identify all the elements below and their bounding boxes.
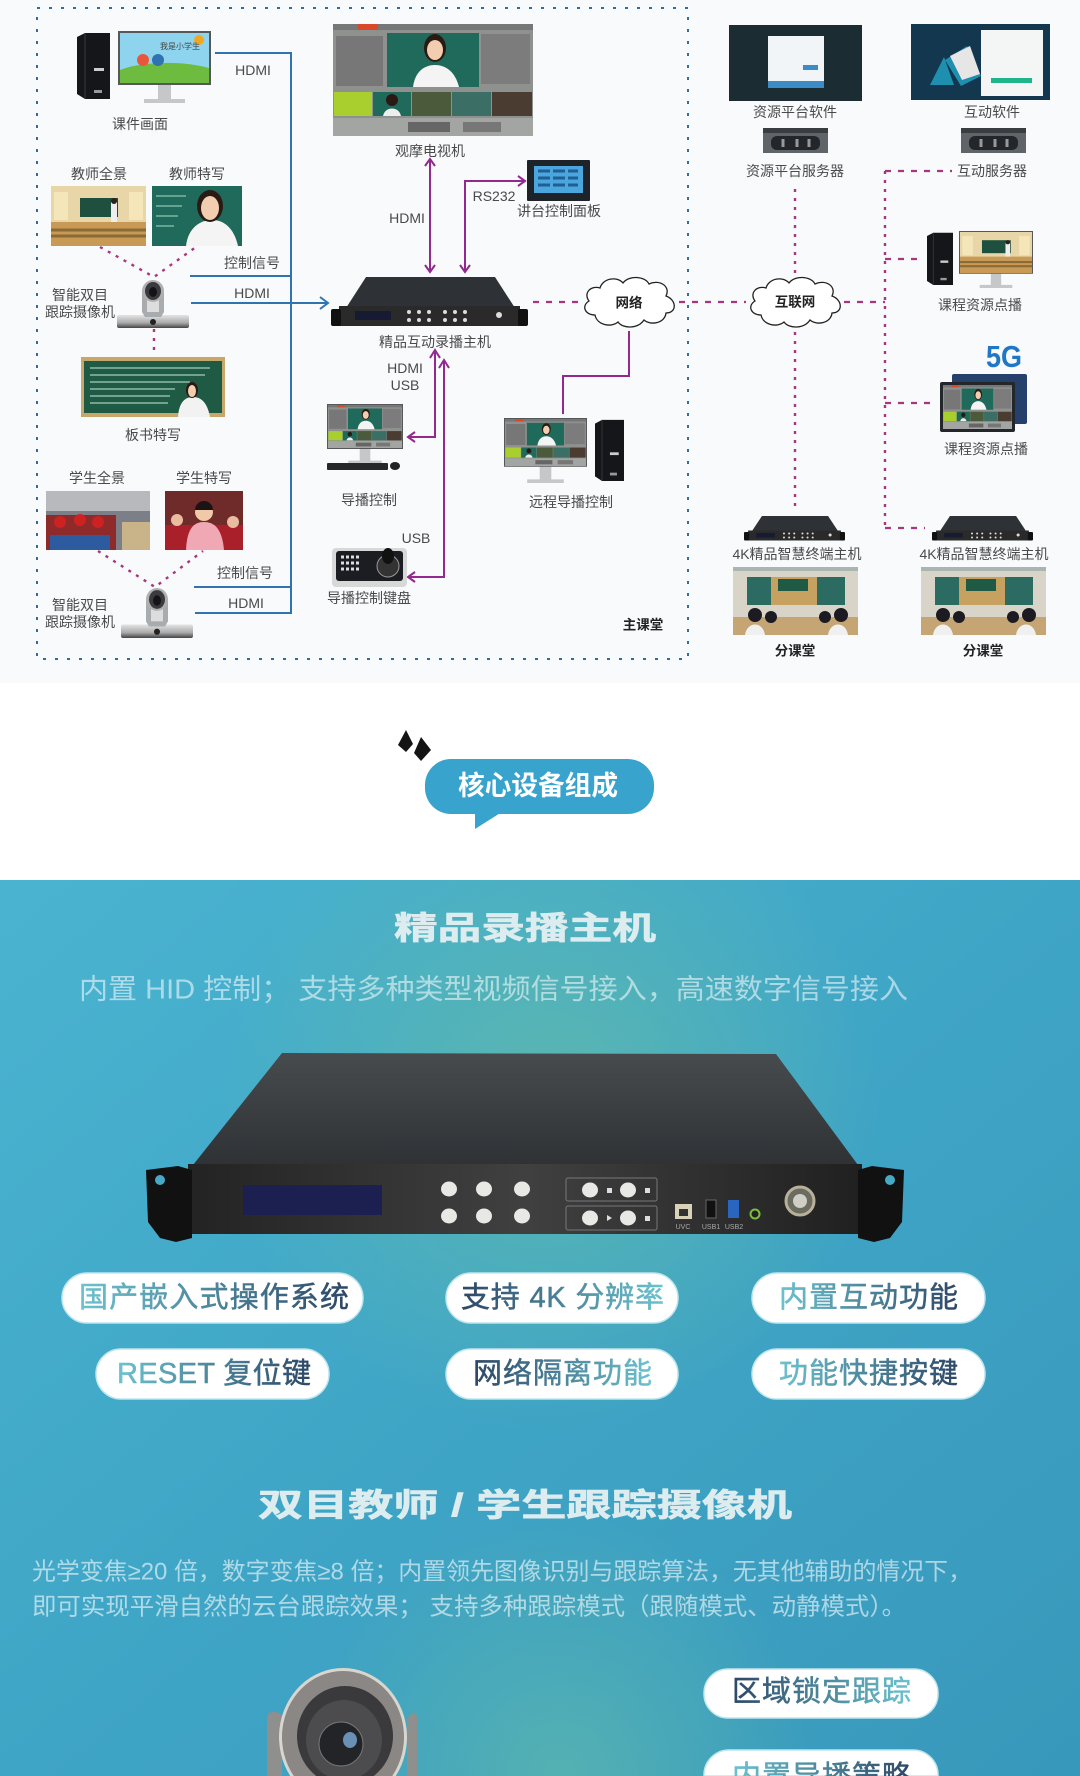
connector: host to network — [533, 301, 581, 303]
icon: courseware monitor: 我是小学生 — [160, 41, 200, 51]
label: HDMI courseware: HDMI — [235, 62, 271, 78]
picture: branch classroom right — [921, 567, 1046, 635]
pill: built-in directing strategy — [704, 1750, 938, 1776]
connector: internet branch trunk — [844, 171, 952, 528]
pill: 4K resolution: 支持 4K 分辨率 — [461, 1281, 664, 1314]
label: branch classroom right: 分课堂 — [963, 642, 1003, 658]
arrow: HDMI two way to viewing TV — [425, 159, 435, 272]
label: recording host: 精品互动录播主机 — [379, 334, 491, 350]
pill: zone lock tracking: 区域锁定跟踪 — [732, 1675, 911, 1708]
connector: student camera fields of view — [98, 551, 203, 587]
picture: student close-up — [165, 491, 243, 550]
label: HDMI USB — [387, 360, 423, 393]
label: teacher panorama: 教师全景 — [71, 166, 127, 182]
icon: branch 4K host left — [744, 516, 845, 540]
panel: white heading band — [0, 683, 1080, 880]
text: recording host description: 内置 HID 控制； 支持多种类型视频信号接入，高速数字信号接入 — [79, 974, 908, 1004]
label: tablet on-demand: 课程资源点播 — [944, 441, 1028, 457]
figure: recording host device: UVC — [676, 1224, 690, 1231]
icon: internet cloud — [751, 277, 840, 327]
picture: blackboard close-up — [81, 357, 225, 417]
icon: teacher tracking camera — [117, 280, 189, 328]
picture: teacher close-up — [152, 186, 242, 246]
icon: recording host — [331, 277, 528, 326]
connector: teacher camera fields of view — [100, 247, 196, 277]
icon: resource server — [763, 128, 828, 153]
label: director control: 导播控制 — [341, 492, 397, 508]
pill: zone lock tracking — [704, 1669, 938, 1718]
label: USB keyboard: USB — [402, 530, 430, 546]
figure: recording host device — [146, 1053, 904, 1242]
label: student camera: 跟踪摄像机 — [45, 614, 115, 630]
pill: reset key: RESET 复位键 — [117, 1357, 311, 1390]
panel: main classroom dashed boundary — [37, 8, 688, 659]
label: student camera — [45, 597, 115, 630]
figure: recording host device: USB1 — [702, 1224, 720, 1231]
label: HDMI viewing: HDMI — [389, 210, 425, 226]
label: 4K terminal right: 4K精品智慧终端主机 — [919, 546, 1049, 562]
label: interactive server: 互动服务器 — [957, 163, 1027, 179]
label: resource server: 资源平台服务器 — [746, 163, 844, 179]
pill: network isolation — [446, 1349, 678, 1399]
pill: function shortcut keys: 功能快捷按键 — [779, 1357, 958, 1390]
panel: system topology background — [0, 0, 1080, 683]
heading bubble: core equipment: 核心设备组成 — [458, 771, 618, 801]
connector: network to remote director — [563, 331, 629, 414]
label: HDMI USB: USB — [391, 377, 419, 393]
label: teacher camera: 跟踪摄像机 — [45, 304, 115, 320]
pill: reset key — [96, 1349, 329, 1399]
picture: resource platform software — [729, 25, 862, 101]
icon: courseware PC tower — [77, 33, 110, 99]
connector: internet to branch classroom — [794, 332, 796, 510]
label: student panorama: 学生全景 — [69, 470, 125, 486]
connector: network to internet — [679, 301, 746, 303]
icon: courseware monitor — [118, 31, 211, 103]
label: control signal: 控制信号 — [224, 255, 280, 271]
label: RS232: RS232 — [473, 188, 516, 204]
icon: director keyboard — [332, 548, 407, 587]
icon: director monitor and keyboard — [327, 404, 403, 470]
text: camera description line one: 光学变焦≥20 倍，数字变焦≥8 倍；内置领先图像识别与跟踪算法，无其他辅助的情况下， — [32, 1558, 972, 1586]
icon: on-demand monitor — [959, 231, 1033, 288]
icon: tablet with lesson — [940, 374, 1027, 432]
picture: viewing TV interface — [333, 24, 533, 136]
pill: 4K resolution — [446, 1273, 678, 1323]
icon: internet cloud: 互联网 — [775, 294, 815, 310]
icon: remote director tower — [595, 420, 624, 481]
connector: camera to blackboard — [153, 329, 155, 356]
text: camera description line two: 即可实现平滑自然的云台跟踪效果； 支持多种跟踪模式（跟随模式、动静模式）。 — [32, 1594, 906, 1620]
picture: interactive software — [911, 24, 1050, 100]
label: courseware: 课件画面 — [112, 116, 168, 132]
label: remote director: 远程导播控制 — [529, 494, 613, 510]
connector: student camera control signal — [194, 586, 291, 588]
pill: domestic embedded OS: 国产嵌入式操作系统 — [79, 1281, 349, 1314]
icon: podium control panel — [527, 160, 590, 201]
heading: dual-lens camera: 双目教师 / 学生跟踪摄像机 — [258, 1487, 792, 1523]
picture: branch classroom left — [733, 567, 858, 635]
arrow: director control link — [408, 350, 440, 442]
heading: recording host: 精品录播主机 — [394, 910, 656, 946]
label: branch classroom left: 分课堂 — [775, 642, 815, 658]
pill: network isolation: 网络隔离功能 — [473, 1357, 652, 1390]
icon: network cloud: 网络 — [616, 294, 643, 310]
arrow: keyboard link — [408, 360, 449, 582]
pill: domestic embedded OS — [62, 1273, 363, 1323]
icon: on-demand PC tower — [927, 233, 953, 285]
pill: built-in interaction: 内置互动功能 — [779, 1281, 958, 1314]
label: interactive software: 互动软件 — [964, 104, 1020, 120]
label: resource platform software: 资源平台软件 — [753, 104, 837, 120]
label: student close-up: 学生特写 — [176, 470, 232, 486]
picture: student panorama — [46, 491, 150, 550]
icon: 5G badge: 5G — [986, 339, 1022, 374]
label: teacher camera — [45, 287, 115, 320]
icon: network cloud — [585, 277, 674, 327]
label: main classroom: 主课堂 — [623, 616, 663, 632]
label: teacher camera: 智能双目 — [52, 287, 108, 303]
label: student camera: 智能双目 — [52, 597, 108, 613]
label: HDMI USB: HDMI — [387, 360, 423, 376]
icon: remote director monitor — [504, 418, 587, 483]
connector: internet to resource server — [794, 189, 796, 273]
icon: interactive server — [961, 128, 1026, 153]
label: director keyboard: 导播控制键盘 — [327, 590, 411, 606]
figure: tracking camera — [267, 1668, 417, 1776]
picture: teacher panorama — [51, 186, 146, 246]
heading bubble: core equipment — [425, 759, 654, 829]
connector: courseware HDMI line — [195, 53, 291, 613]
pill: function shortcut keys — [752, 1349, 985, 1399]
arrow: signal into recording host — [191, 297, 328, 309]
label: on-demand: 课程资源点播 — [938, 297, 1022, 313]
label: viewing TV: 观摩电视机 — [395, 143, 465, 159]
icon: student tracking camera — [121, 588, 193, 638]
label: student HDMI: HDMI — [228, 595, 264, 611]
label: podium control panel: 讲台控制面板 — [517, 203, 601, 219]
icon: decorative diamonds — [398, 730, 431, 761]
figure: recording host device: USB2 — [725, 1224, 743, 1231]
pill: built-in interaction — [752, 1273, 985, 1323]
label: 4K terminal left: 4K精品智慧终端主机 — [732, 546, 862, 562]
label: teacher close-up: 教师特写 — [169, 166, 225, 182]
label: blackboard close-up: 板书特写 — [125, 427, 181, 443]
label: student control signal: 控制信号 — [217, 565, 273, 581]
panel: teal equipment section — [0, 880, 1080, 1776]
icon: branch 4K host right — [932, 516, 1033, 540]
arrow: RS232 to control panel — [460, 176, 525, 272]
label: HDMI camera: HDMI — [234, 285, 270, 301]
connector: teacher camera control signal — [190, 275, 291, 277]
